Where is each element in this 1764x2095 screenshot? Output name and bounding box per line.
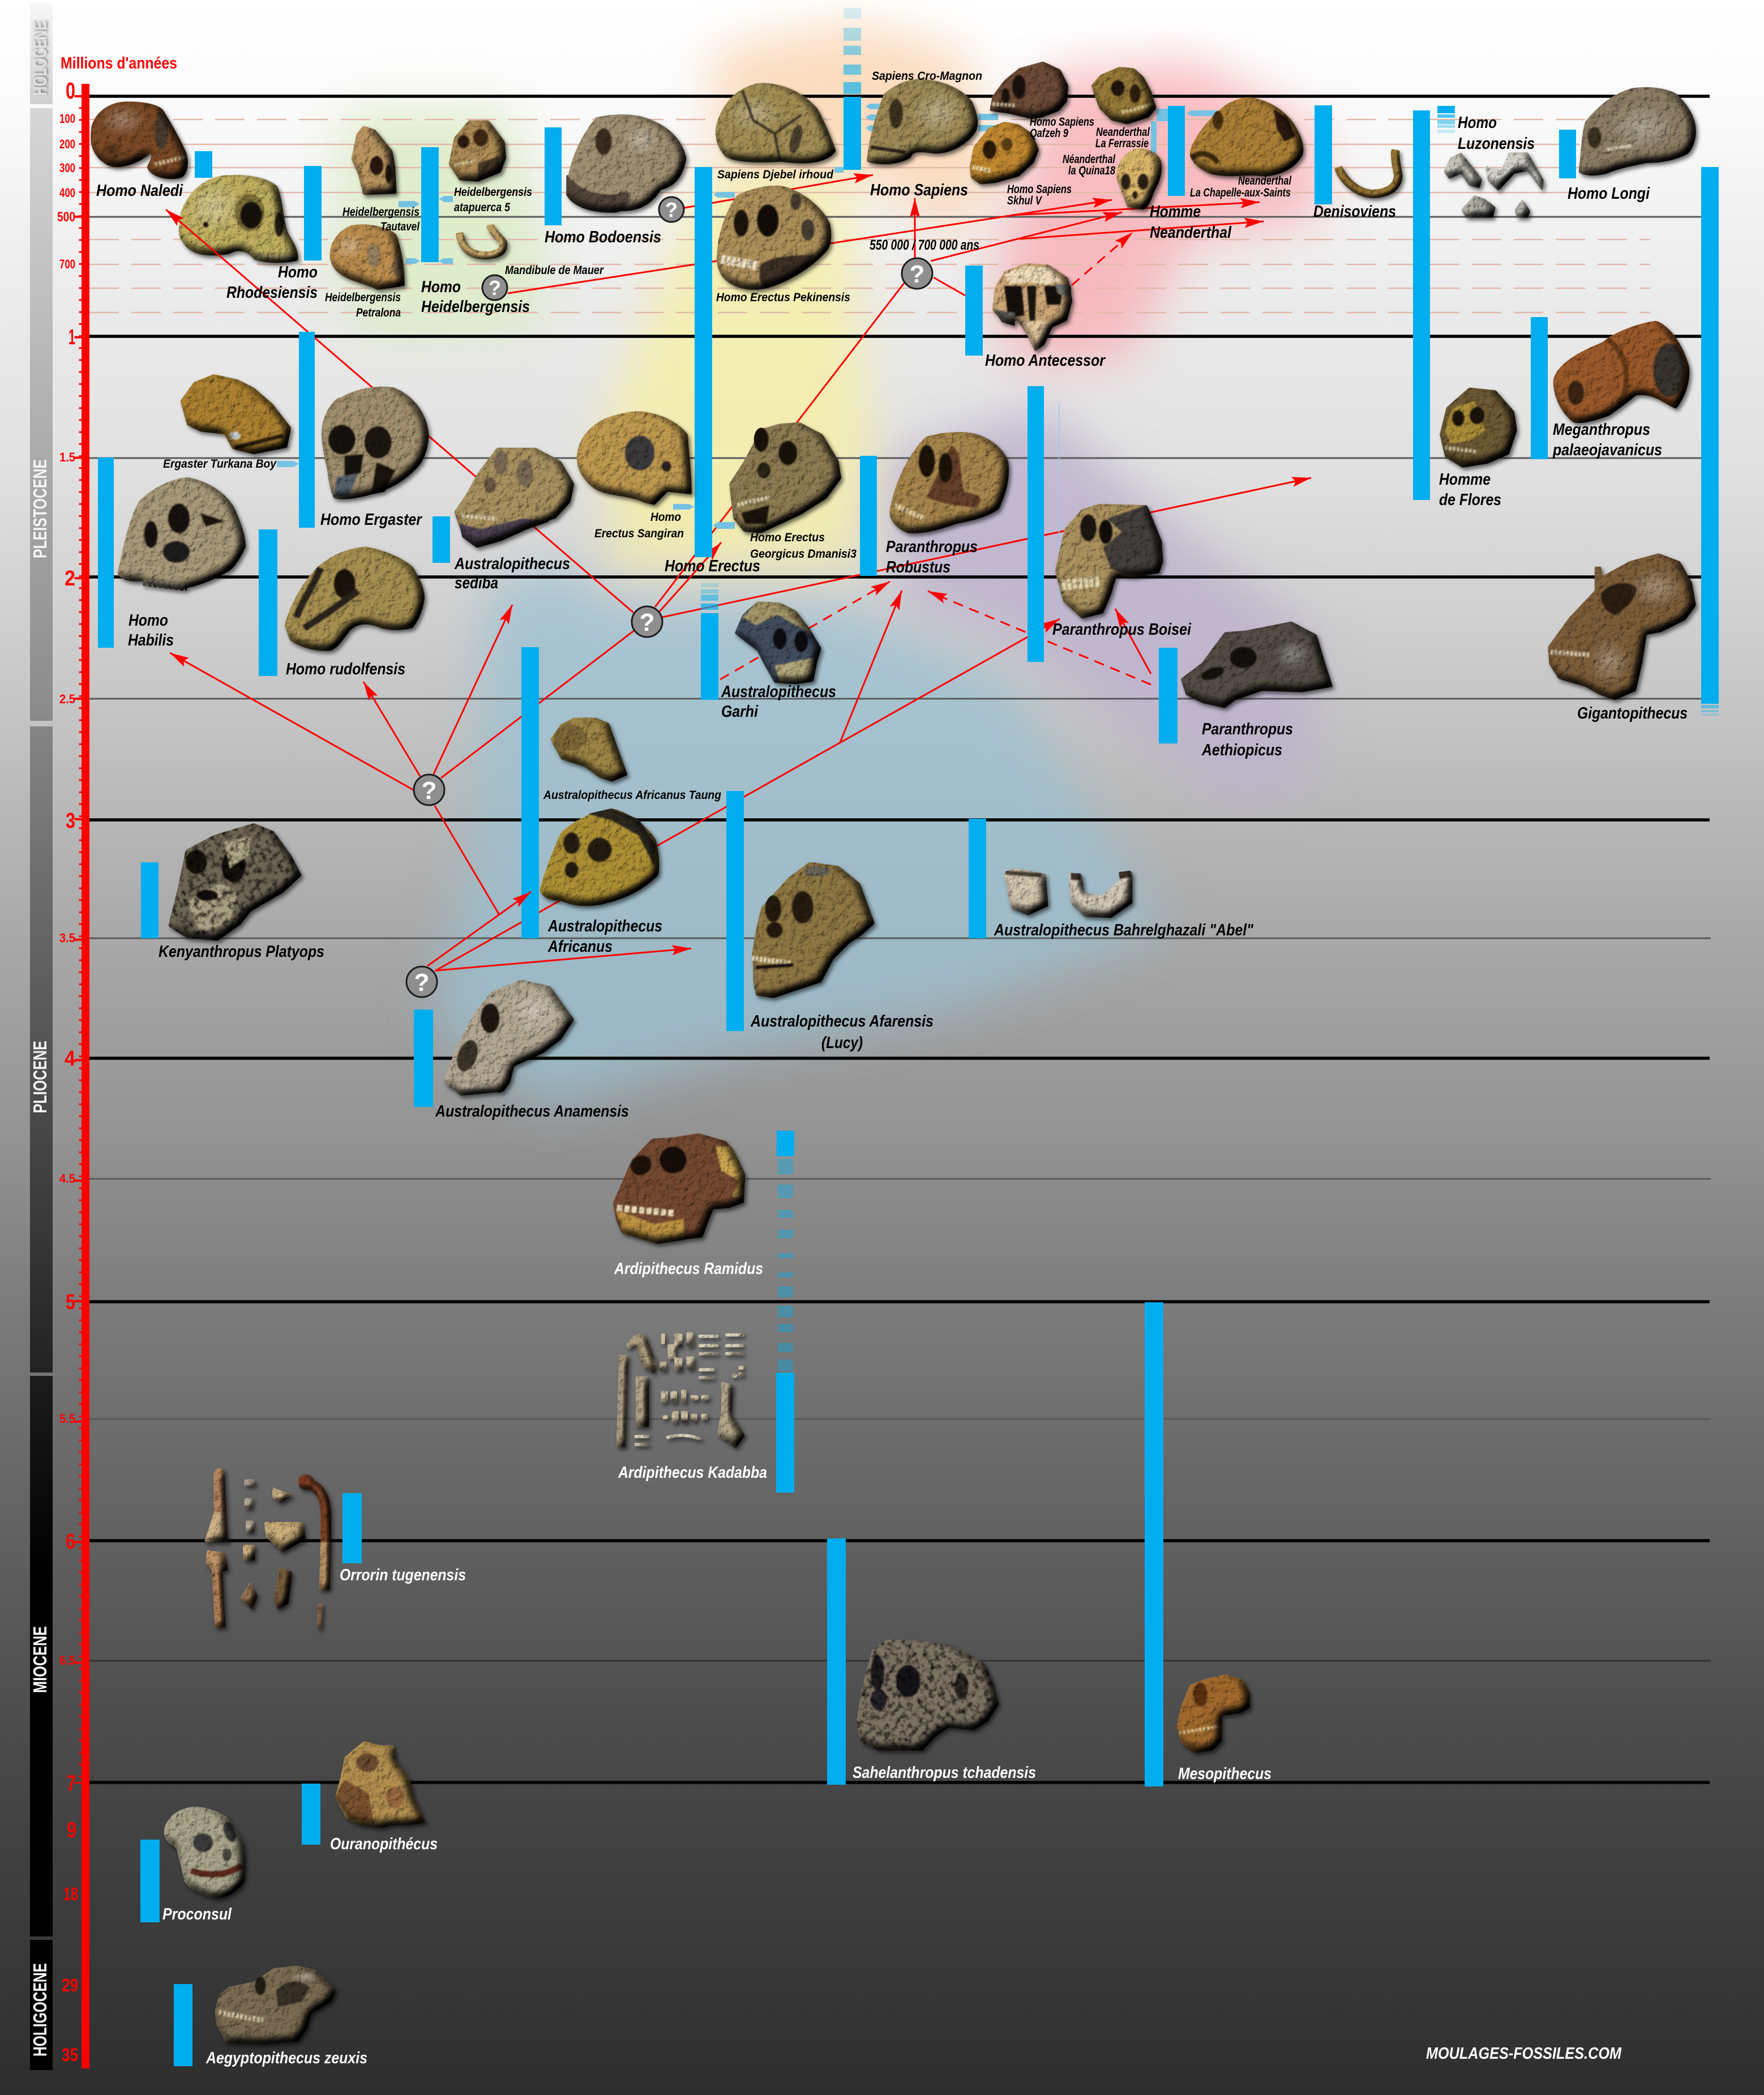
- bar: Homo Erectus: [695, 167, 712, 557]
- question marker: Bodoensis: [659, 197, 684, 222]
- skull: Ergaster Turkana Boy: [180, 374, 291, 454]
- label: Australopithecus Afarensis Lucy: (Lucy): [821, 1034, 863, 1052]
- arrow: Q6 to Australopithecus Africanus: [427, 892, 531, 966]
- label: Ardipithecus Kadabba: Ardipithecus Kadabba: [618, 1464, 767, 1482]
- label: Homo Rhodesiensis: Homo: [278, 263, 318, 281]
- skull: Australopithecus Africanus Taung: [550, 717, 628, 782]
- axis numbers: 3.5: [59, 931, 75, 945]
- bar: Paranthropus Aethiopicus: [1159, 648, 1178, 743]
- bar: Homme de Flores: [1413, 110, 1430, 500]
- label: Homo Habilis: [128, 612, 174, 649]
- label: date range: 550 000 / 700 000 ans: [870, 237, 979, 253]
- label: Neanderthal La Ferrassie: [1095, 126, 1150, 150]
- evolution arrows: [166, 175, 1311, 971]
- axis title: Millions d'années: [61, 54, 177, 72]
- axis numbers: 18: [63, 1884, 78, 1904]
- question marker: Homo origin: ?: [422, 777, 436, 805]
- bar: Ouranopithecus: [302, 1784, 320, 1845]
- skull: Homo Antecessor: [992, 263, 1072, 352]
- question marker: Australopithecus origin: ?: [414, 969, 429, 997]
- specimen pointers: [277, 104, 1218, 529]
- skull: Proconsul: [164, 1807, 245, 1899]
- label: Australopithecus Garhi: [721, 683, 836, 721]
- label: Australopithecus Africanus: Australopithecus: [547, 917, 662, 935]
- label: Heidelbergensis atapuerca 5: atapuerca 5: [454, 201, 510, 214]
- arrow: Neanderthal branch to Denisoviens upper: [1012, 202, 1260, 215]
- label: Homo Sapiens Qafzeh 9: Qafzeh 9: [1030, 127, 1068, 140]
- bar: Homo Luzonensis: [1437, 106, 1455, 133]
- axis numbers: 5.5: [59, 1412, 75, 1426]
- question marker: Bodoensis: ?: [665, 198, 678, 221]
- axis numbers: 6.5: [59, 1653, 75, 1668]
- label: Ouranopithécus: Ouranopithécus: [330, 1835, 438, 1853]
- label: Homo Erectus Sangiran: Homo: [650, 511, 681, 524]
- bar: Meganthropus: [1531, 317, 1548, 459]
- skull: Homo Rhodesiensis: [179, 175, 298, 263]
- bar: Proconsul: [140, 1840, 160, 1922]
- bar: Ardipithecus Kadabba: [776, 1373, 794, 1493]
- axis numbers: 200: [59, 137, 75, 151]
- axis numbers: 2.5: [59, 692, 75, 706]
- label: Meganthropus palaeojavanicus: Meganthropus: [1553, 421, 1650, 439]
- bar: Australopithecus Garhi: [701, 613, 718, 700]
- label: Homo Bodoensis: Homo Bodoensis: [545, 228, 661, 246]
- bar: Orrorin: [342, 1493, 362, 1563]
- label: Australopithecus Africanus Taung: Australopithecus Africanus Taung: [543, 789, 721, 802]
- question marker: Mauer: ?: [489, 276, 501, 300]
- arrow: branch to Paranthropus Robustus: [840, 591, 902, 742]
- skull: Homo Luzonensis fragments: [1444, 152, 1544, 218]
- axis numbers: 9: [67, 1818, 76, 1842]
- label: Homo Naledi: Homo Naledi: [96, 182, 183, 200]
- fossils: Orrorin tugenensis fragments: [204, 1469, 326, 1629]
- label: Paranthropus Aethiopicus: Paranthropus: [1202, 720, 1293, 738]
- arrow: Q2 to Homo Sapiens: [684, 175, 873, 208]
- question marker: Erectus origin: ?: [640, 609, 654, 636]
- skull: Homo rudolfensis: [284, 546, 425, 651]
- skull: Homo Erectus Sangiran: [577, 411, 692, 505]
- bar: Homo Heidelbergensis: [421, 147, 439, 262]
- label: Homo Habilis: Habilis: [128, 631, 174, 649]
- label: Mandibule de Mauer: Mandibule de Mauer: [505, 264, 605, 277]
- label: Ardipithecus Ramidus: Ardipithecus Ramidus: [614, 1260, 763, 1278]
- skull: Australopithecus Anamensis: [443, 980, 574, 1096]
- label: Homo Sapiens: Homo Sapiens: [870, 181, 968, 199]
- zone: erectus yellow: [606, 176, 872, 566]
- skull: Sahelanthropus tchadensis: [856, 1640, 999, 1751]
- label: Homo Luzonensis: Homo: [1458, 114, 1497, 132]
- axis numbers: 500: [57, 210, 75, 225]
- label: Paranthropus Robustus: Robustus: [886, 558, 950, 576]
- skull: Homo Sapiens Qafzeh 9: [990, 62, 1068, 119]
- axis numbers: 4.5: [59, 1172, 75, 1186]
- label: Neanderthal La Ferrassie: La Ferrassie: [1095, 137, 1149, 150]
- arrow: Q4 to Homo Naledi: [166, 210, 633, 613]
- line: Q5 down: [435, 806, 499, 914]
- arrow: Q5 to Homo Habilis: [170, 653, 413, 790]
- axis numbers: 5: [66, 1290, 75, 1314]
- skull: Homo Habilis: [118, 477, 246, 589]
- line: Q5 to Q4: [441, 630, 635, 778]
- skull: Neanderthal La Chapelle-aux-Saints: [1190, 97, 1303, 177]
- label: Paranthropus Robustus: Paranthropus: [886, 538, 978, 556]
- label: Heidelbergensis atapuerca 5: [454, 186, 532, 214]
- label: Heidelbergensis Petralona: Heidelbergensis: [325, 291, 401, 304]
- label: Heidelbergensis Petralona: [325, 291, 401, 319]
- axis numbers: 35: [62, 2045, 78, 2065]
- bar: Denisoviens: [1315, 105, 1332, 204]
- bar: Kenyanthropus: [141, 862, 159, 938]
- bar: Homo Sapiens: [844, 97, 861, 170]
- bar: Gigantopithecus: [1701, 167, 1719, 704]
- label: Homo rudolfensis: Homo rudolfensis: [286, 660, 405, 678]
- half-million grid lines: [89, 217, 1711, 1661]
- bar: Ardipithecus Ramidus: [777, 1131, 794, 1156]
- axis numbers: 4: [65, 1047, 75, 1071]
- skull: Paranthropus Aethiopicus: [1180, 621, 1333, 708]
- skull: Denisovan mandible: [1338, 149, 1398, 194]
- label: Homo Erectus Georgicus Dmanisi3: [750, 531, 857, 561]
- label: Homo Rhodesiensis: Rhodesiensis: [226, 284, 318, 302]
- bar: Australopithecus Afarensis: [726, 791, 744, 1031]
- bar: Homo Naledi: [195, 151, 212, 178]
- bar: Paranthropus Boisei: [1027, 386, 1044, 662]
- label: Heidelbergensis Tautavel: [342, 206, 420, 233]
- label: Néanderthal la Quina18: [1063, 153, 1116, 177]
- label: Homo Antecessor: Homo Antecessor: [985, 352, 1106, 370]
- label: Neanderthal La Chapelle-aux-Saints: Neanderthal: [1238, 174, 1292, 187]
- axis numbers: 2: [65, 567, 75, 591]
- label: Homo Habilis: Homo: [129, 612, 168, 630]
- bar: Anamensis: [414, 1010, 433, 1107]
- label: Meganthropus palaeojavanicus: [1552, 421, 1662, 459]
- bar: Homo Antecessor: [965, 266, 983, 356]
- label: Australopithecus Africanus: [547, 917, 662, 956]
- label: Sahelanthropus tchadensis: Sahelanthropus tchadensis: [853, 1764, 1036, 1782]
- label: Heidelbergensis atapuerca 5: Heidelbergensis: [454, 186, 532, 199]
- axis numbers: 1: [68, 326, 75, 349]
- skull: Mandibule de Mauer: [459, 224, 503, 255]
- skull: Heidelbergensis Petralona: [330, 224, 405, 290]
- skull: Homo Erectus Dmanisi: [729, 422, 841, 533]
- label: Homme de Flores: Homme: [1439, 471, 1491, 489]
- question marker: Erectus origin: [632, 606, 662, 637]
- label: Homo Heidelbergensis: Heidelbergensis: [421, 298, 530, 316]
- label: Homo Sapiens Skhul V: Homo Sapiens: [1007, 183, 1072, 196]
- arrow: Q4 to Homo Erectus: [660, 542, 721, 612]
- era bar: pliocene: PLIOCENE: [29, 1041, 50, 1113]
- label: Paranthropus Aethiopicus: Aethiopicus: [1201, 741, 1282, 759]
- skull: Gigantopithecus: [1548, 553, 1696, 700]
- skull: Homme de Flores: [1440, 387, 1517, 468]
- arrow: Q4 to far right: [662, 478, 1311, 617]
- skull: Australopithecus Garhi: [734, 601, 821, 684]
- label: Homo Ergaster: Homo Ergaster: [320, 511, 422, 529]
- label: Proconsul: Proconsul: [162, 1905, 232, 1923]
- label: Aegyptopithecus zeuxis: Aegyptopithecus zeuxis: [205, 2049, 367, 2067]
- question marker: Mauer: [482, 275, 507, 300]
- skull: Homo Longi: [1578, 87, 1696, 176]
- skull: Aegyptopithecus zeuxis: [215, 1966, 336, 2045]
- label: Néanderthal la Quina18: Néanderthal: [1063, 153, 1116, 166]
- bar: Aegyptopithecus: [174, 1984, 192, 2066]
- credit: MOULAGES-FOSSILES.COM: [1426, 2045, 1622, 2063]
- bar: Australopithecus Africanus: [521, 647, 539, 938]
- skull: Mesopithecus: [1176, 1674, 1250, 1753]
- bar: Homo rudolfensis: [259, 529, 277, 676]
- label: Australopithecus Africanus: Africanus: [547, 938, 613, 956]
- colour zones: [334, 23, 1325, 1110]
- skull: Australopithecus sediba: [454, 448, 574, 548]
- label: Mesopithecus: Mesopithecus: [1178, 1765, 1271, 1783]
- zone: australopithecus blue: [430, 566, 1166, 1110]
- label: Australopithecus sediba: Australopithecus: [454, 555, 570, 573]
- label: Homme de Flores: de Flores: [1439, 491, 1501, 509]
- axis numbers: 0: [66, 78, 75, 104]
- bar: Australopithecus sediba: [433, 516, 450, 563]
- arrow: branch to Denisoviens lower: [1020, 221, 1264, 239]
- era bar: holigocene: HOLIGOCENE: [29, 1963, 50, 2056]
- label: Homme Neanderthal: Homme: [1150, 203, 1201, 221]
- bar: Homo Ergaster: [299, 332, 315, 528]
- label: Homo Rhodesiensis: [226, 263, 318, 302]
- skull: Meganthropus palaeojavanicus: [1553, 320, 1689, 423]
- zone: neanderthal red: [996, 62, 1325, 362]
- arrow: Q6 to Paranthropus Boisei: [435, 619, 1060, 971]
- bar: Homo Bodoensis: [545, 127, 562, 225]
- skull: Homo Sapiens Cro-Magnon: [867, 79, 978, 164]
- skull: Homo Naledi: [91, 101, 188, 179]
- question marker: 550000: ?: [910, 260, 924, 288]
- label: Heidelbergensis Tautavel: Heidelbergensis: [342, 206, 419, 219]
- bar: Homo Rhodesiensis: [304, 166, 322, 260]
- skull: Ouranopithecus: [335, 1741, 426, 1828]
- skull: Homo Ergaster: [322, 387, 429, 499]
- label: Homo Sapiens Qafzeh 9: [1030, 116, 1094, 140]
- label: Sapiens Cro-Magnon: Sapiens Cro-Magnon: [872, 70, 982, 83]
- label: Heidelbergensis Tautavel: Tautavel: [380, 220, 420, 233]
- arrow: Q5 to Homo rudolfensis: [363, 682, 420, 776]
- label: Neanderthal La Chapelle-aux-Saints: [1190, 174, 1292, 199]
- label: Homo Longi: Homo Longi: [1568, 185, 1650, 203]
- axis numbers: 7: [67, 1771, 76, 1796]
- question marker: Australopithecus origin: [406, 967, 437, 997]
- label: Homme Neanderthal: [1150, 203, 1232, 242]
- label: Homo Luzonensis: [1458, 114, 1535, 153]
- label: Homo Heidelbergensis: [421, 278, 530, 316]
- label: Homo Erectus Sangiran: [594, 511, 684, 540]
- bar: Homo Sapiens fading: [844, 8, 861, 94]
- label: Homo Erectus: Homo Erectus: [665, 557, 760, 575]
- label: Australopithecus sediba: [454, 555, 570, 592]
- bar: Paranthropus Robustus: [860, 456, 877, 576]
- label: Australopithecus sediba: sediba: [455, 574, 498, 592]
- bar: Mesopithecus: [1145, 1302, 1163, 1786]
- skull: Kenyanthropus Platyops: [168, 823, 302, 940]
- label: Paranthropus Boisei: Paranthropus Boisei: [1052, 621, 1192, 639]
- label: Ergaster Turkana Boy: Ergaster Turkana Boy: [163, 458, 277, 471]
- label: Heidelbergensis Petralona: Petralona: [356, 306, 401, 319]
- bar: Bahrelghazali: [969, 819, 986, 938]
- era bar: pleistocene: PLEISTOCENE: [29, 459, 50, 558]
- era bar: pliocene: [29, 726, 53, 1373]
- axis numbers: 1.5: [59, 450, 75, 464]
- label: Homo Heidelbergensis: Homo: [421, 278, 461, 296]
- label: Paranthropus Robustus: [886, 538, 978, 576]
- zone: heidelbergensis green: [334, 110, 546, 340]
- axis numbers: 300: [59, 161, 75, 175]
- axis numbers: 400: [59, 186, 75, 200]
- skull: Sapiens Djebel irhoud: [716, 83, 836, 164]
- label: Homme Neanderthal: Neanderthal: [1150, 224, 1232, 242]
- bar: Gigantopithecus fading: [1701, 705, 1719, 716]
- axis numbers: 100: [59, 112, 75, 126]
- era bar: miocene: [29, 1376, 53, 1936]
- skull: Paranthropus Boisei: [1055, 504, 1163, 619]
- whole-million grid lines: [89, 96, 1710, 1782]
- label: Australopithecus Garhi: Australopithecus: [721, 683, 836, 701]
- question marker: 550000: [902, 258, 932, 289]
- skull: Néanderthal la Quina18: [1116, 148, 1162, 210]
- label: Homo Sapiens Skhul V: [1007, 183, 1072, 207]
- label: Orrorin tugenensis: Orrorin tugenensis: [340, 1566, 466, 1584]
- label: Homo Sapiens Qafzeh 9: Homo Sapiens: [1030, 116, 1094, 129]
- bar: Homo Habilis: [98, 458, 114, 648]
- arrow: Garhi dashed to Robustus: [720, 582, 890, 679]
- label: Australopithecus Afarensis Lucy: Australopithecus Afarensis: [750, 1012, 934, 1031]
- label: Australopithecus Afarensis Lucy: [750, 1012, 934, 1052]
- label: Homo Erectus Sangiran: Erectus Sangiran: [594, 527, 684, 540]
- zone: paranthropus purple: [883, 408, 1313, 804]
- bar: Homme Neanderthal: [1168, 106, 1185, 196]
- label: Homo Erectus Georgicus Dmanisi3: Homo Erectus: [750, 531, 825, 544]
- line: Q3 to Antecessor: [934, 277, 965, 296]
- line: Q4 to Q3: [655, 283, 904, 607]
- bar: Ramidus fading: [778, 1159, 793, 1371]
- label: Néanderthal la Quina18: la Quina18: [1068, 164, 1115, 177]
- axis numbers: 700: [59, 257, 75, 271]
- skull: Australopithecus Afarensis: [752, 862, 875, 998]
- era bar: pleistocene: [29, 108, 53, 721]
- label: Homo Erectus Pekinensis: Homo Erectus Pekinensis: [716, 291, 850, 304]
- axis numbers: 6: [66, 1530, 75, 1554]
- bar: Homo Longi: [1559, 130, 1576, 178]
- zone: sapiens orange: [713, 23, 996, 238]
- label: Neanderthal La Ferrassie: Neanderthal: [1096, 126, 1150, 139]
- label: Australopithecus Garhi: Garhi: [721, 703, 759, 721]
- arrow: Aethiopicus dashed to Robustus: [928, 591, 1151, 685]
- bar: Sahelanthropus: [827, 1538, 846, 1785]
- label: Homme de Flores: [1439, 471, 1501, 509]
- skull: Ardipithecus Ramidus: [613, 1133, 745, 1244]
- label: Neanderthal La Chapelle-aux-Saints: La Chapelle-aux-Saints: [1190, 186, 1291, 199]
- label: Denisoviens: Denisoviens: [1313, 203, 1396, 221]
- bar: Garhi fading: [701, 583, 718, 610]
- question marker: Homo origin: [414, 775, 444, 805]
- axis numbers: 29: [62, 1975, 78, 1995]
- label: Australopithecus Anamensis: Australopithecus Anamensis: [435, 1102, 629, 1121]
- skull: Neanderthal La Ferrassie: [1091, 67, 1157, 124]
- skull: Heidelbergensis atapuerca 5: [449, 120, 506, 182]
- arrow: Aethiopicus to Boisei: [1115, 609, 1151, 674]
- skull: Homo Erectus Pekinensis: [717, 186, 831, 290]
- label: Meganthropus palaeojavanicus: palaeojavanicus: [1552, 441, 1662, 459]
- sub-million thin lines: [89, 119, 1650, 313]
- axis numbers: [57, 78, 78, 2065]
- label: Homo Sapiens Skhul V: Skhul V: [1007, 194, 1043, 207]
- skull: Paranthropus Robustus: [889, 432, 1009, 533]
- skull: Australopithecus Africanus: [540, 809, 659, 906]
- label: Sapiens Djebel irhoud: Sapiens Djebel irhoud: [717, 168, 834, 181]
- fossils: Ardipithecus Kadabba fragments: [621, 1332, 745, 1448]
- time axis: [78, 84, 89, 2068]
- label: Paranthropus Aethiopicus: [1201, 720, 1293, 759]
- label: Kenyanthropus Platyops: Kenyanthropus Platyops: [159, 943, 324, 961]
- label: Homo Erectus Georgicus Dmanisi3: Georgicus Dmanisi3: [750, 548, 857, 561]
- arrow: Q6 to Afarensis: [436, 948, 691, 970]
- skull: Homo Bodoensis: [566, 114, 687, 213]
- arrow: Q3 to Neanderthal: [931, 212, 1122, 261]
- arrow: Q5 to Australopithecus sediba: [434, 605, 512, 774]
- arrow: Antecessor dashed to Neanderthal: [1072, 232, 1133, 285]
- arrow: Mauer to Neanderthal: [508, 200, 1112, 293]
- skull: Bahrelghazali Abel mandibles: [1004, 869, 1132, 918]
- skull: Homo Sapiens Skhul V: [970, 122, 1039, 185]
- label: Gigantopithecus: Gigantopithecus: [1577, 704, 1688, 722]
- skull: Heidelbergensis Tautavel: [351, 126, 397, 195]
- label: Australopithecus Bahrelghazali Abel: Australopithecus Bahrelghazali "Abel": [994, 921, 1254, 939]
- axis numbers: 3: [66, 809, 75, 833]
- label: Homo Luzonensis: Luzonensis: [1458, 135, 1535, 153]
- arrow: Q3 to Homo Sapiens: [914, 198, 916, 258]
- bar: Boisei thin line: [1059, 403, 1060, 617]
- era bar: miocene: MIOCENE: [29, 1626, 50, 1693]
